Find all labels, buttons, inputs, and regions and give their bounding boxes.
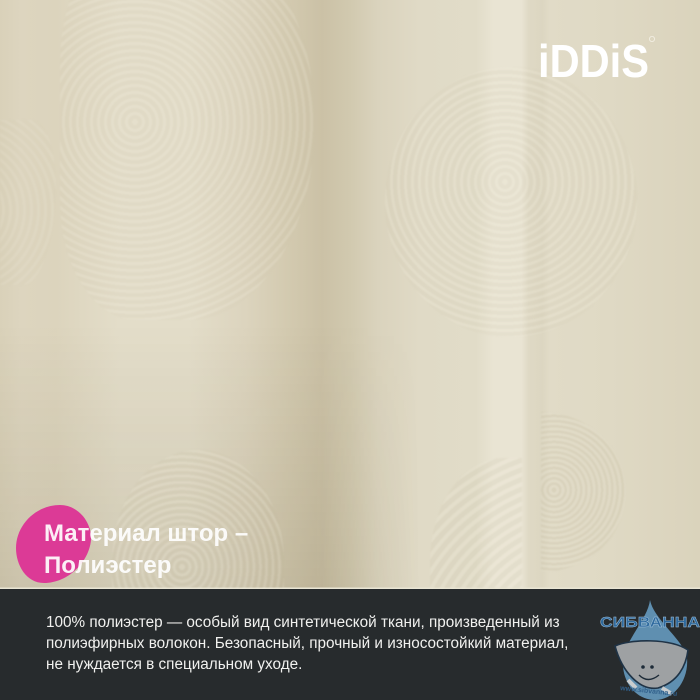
spiral pattern: far-left fragment (0, 120, 56, 285)
spiral pattern: lower centre (112, 450, 284, 588)
heading: material: Полиэстер (44, 552, 171, 579)
body text (46, 614, 568, 673)
watermark logo: Sibvanna (600, 600, 700, 700)
footer panel (0, 589, 700, 700)
spiral pattern: upper left (60, 0, 315, 320)
pink blob behind heading (16, 505, 92, 583)
water drop (623, 600, 687, 700)
body text: не нуждается в специальном уходе. (46, 656, 302, 673)
brand name: СИБВАННА (600, 614, 700, 631)
spiral pattern: lower right (541, 412, 626, 572)
logo: IDDIS: iDDiS (538, 35, 649, 86)
spiral pattern: middle fold fragment (430, 458, 522, 588)
heading: material: Материал штор – (44, 520, 248, 547)
body text: полиэфирных волокон. Безопасный, прочный и износостойкий материал, (46, 635, 568, 652)
body text: 100% полиэстер — особый вид синтетической ткани, произведенный из (46, 614, 560, 631)
heading: material (44, 520, 248, 579)
site url: www.sibvanna.ru (619, 685, 678, 698)
spiral pattern: upper right (385, 67, 637, 337)
bathtub (615, 641, 688, 694)
